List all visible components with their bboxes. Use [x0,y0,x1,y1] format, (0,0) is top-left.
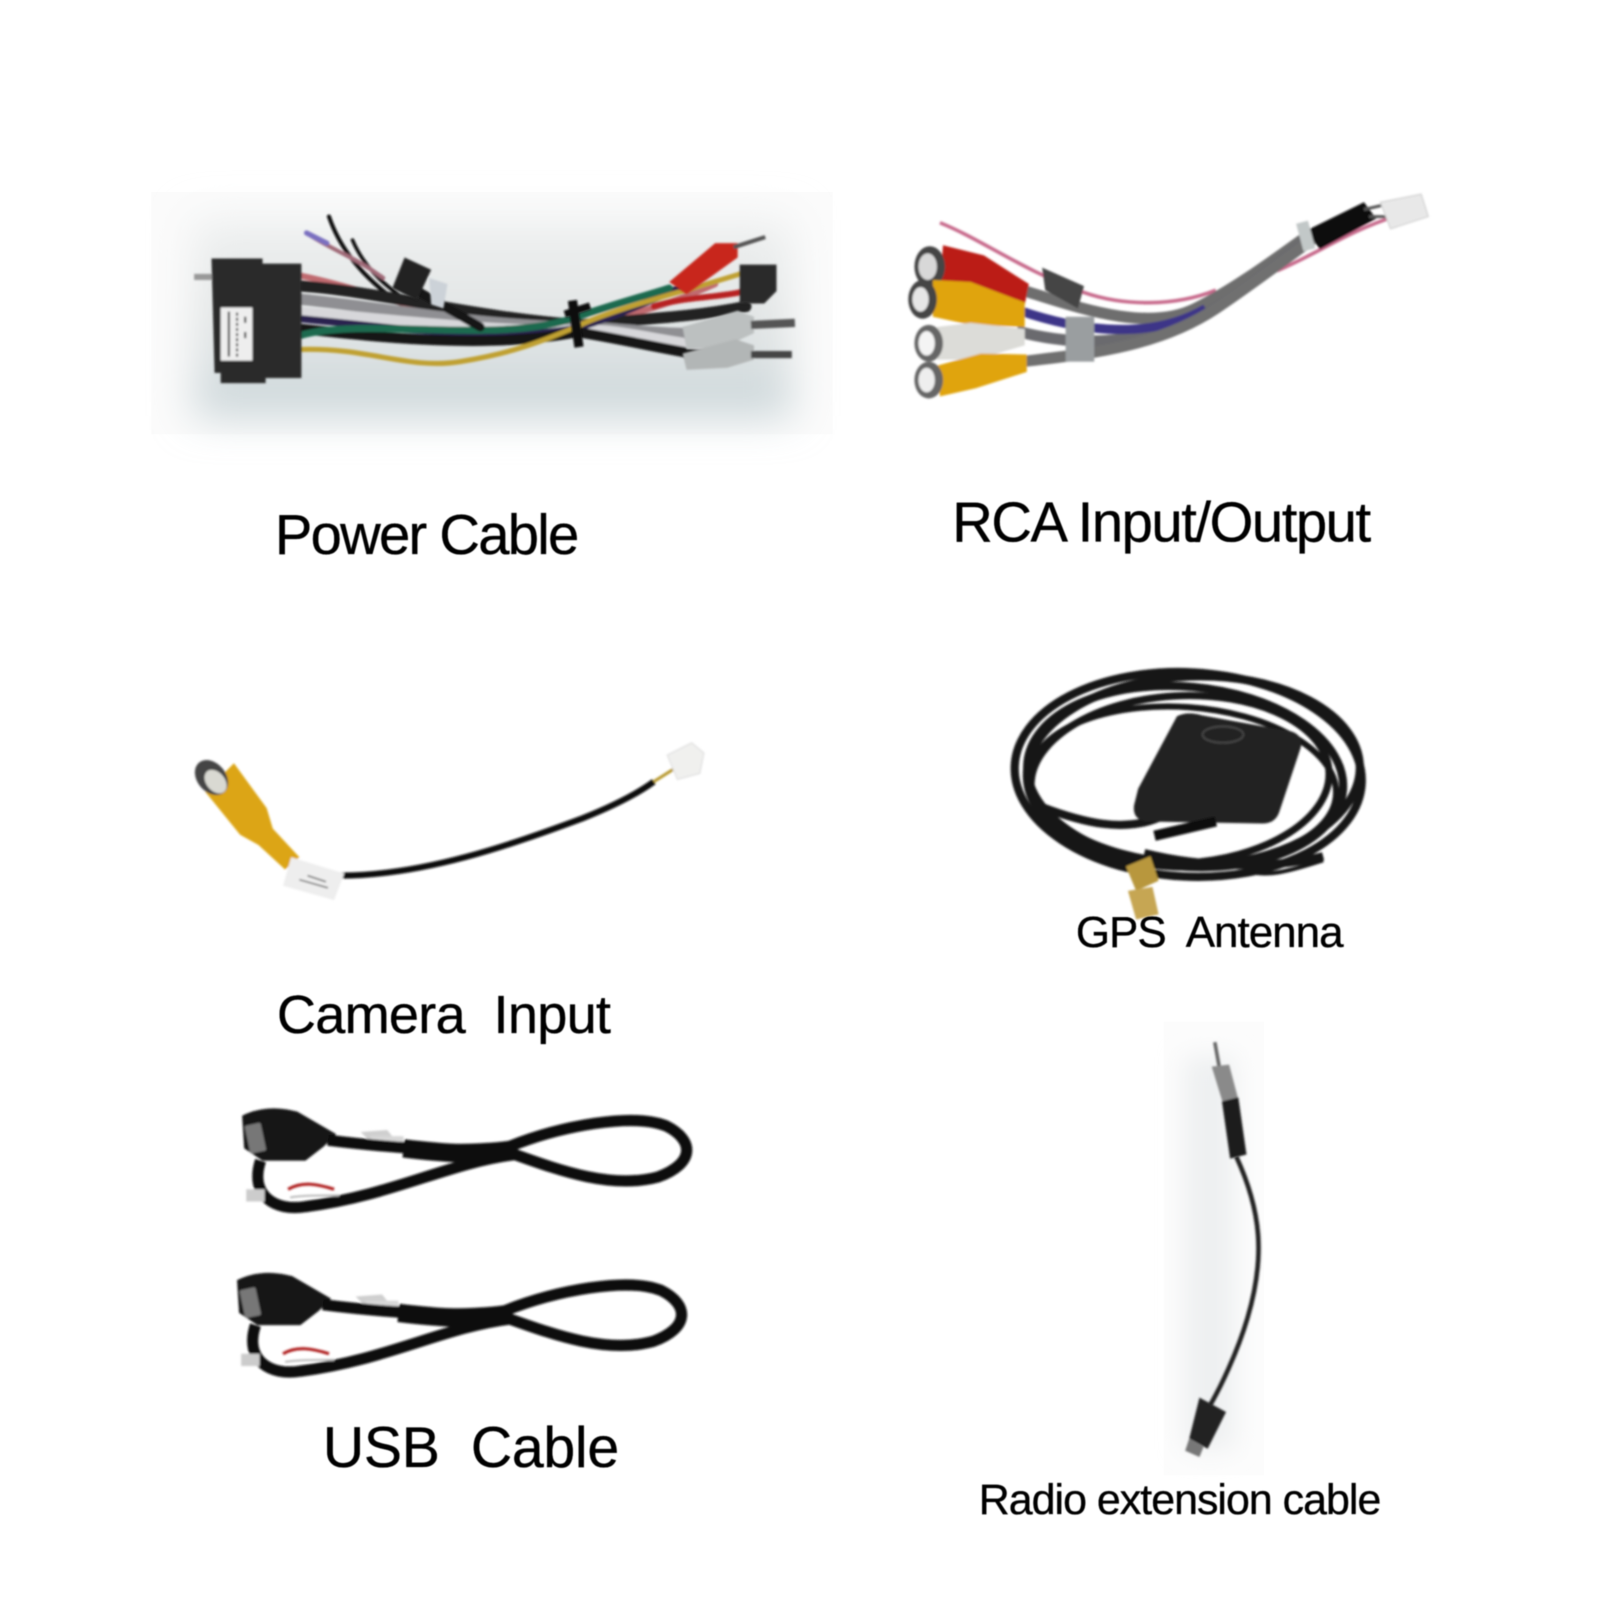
fuse clip and cable tie [392,257,591,348]
puck cable strain relief [1155,821,1216,836]
gold SMA connector [1126,856,1159,920]
pink wires [940,217,1395,303]
cable label tag [283,857,344,900]
black cable [340,782,654,876]
white RCA plugs [682,311,795,370]
red socket [914,245,1029,304]
white plug [1380,194,1428,229]
coiled antenna cable [1009,663,1367,886]
antenna puck [1134,713,1301,823]
panel: radio extension cable [1164,1022,1264,1475]
USB cable 1 [242,1108,687,1208]
panel: GPS antenna [1009,663,1367,920]
yellow socket top [908,280,1025,327]
black sleeve and wire ends [1306,202,1390,249]
white connector [667,743,704,780]
radio cable [1210,1157,1259,1406]
wiring harness [301,217,746,363]
panel: power cable [151,192,833,434]
white socket [914,323,1025,362]
gray cable bundle [1017,232,1313,362]
label: RCA input output: RCA Input/Output [952,490,1371,553]
cable clips [1042,221,1315,362]
USB cable 2 [237,1273,682,1372]
puck logo [1203,726,1243,743]
antenna plug bottom [1185,1398,1226,1457]
label: GPS antenna: GPS Antenna [1076,908,1344,957]
label: radio extension cable: Radio extension cable [979,1476,1381,1524]
photo backdrop [151,192,833,434]
yellow wire end [654,769,673,782]
black main connector [194,258,301,383]
yellow RCA plug [188,753,299,869]
antenna plug top [1212,1042,1246,1159]
panel: RCA input output cable [908,194,1428,398]
label: camera input: Camera Input [277,985,611,1045]
label: power cable: Power Cable [275,503,579,566]
yellow socket bottom [914,354,1027,398]
photo backdrop [1164,1022,1264,1475]
panel: camera input cable [188,743,704,900]
red RCA plug [669,237,765,294]
black small connector [740,265,776,303]
label: USB cable: USB Cable [323,1416,619,1480]
